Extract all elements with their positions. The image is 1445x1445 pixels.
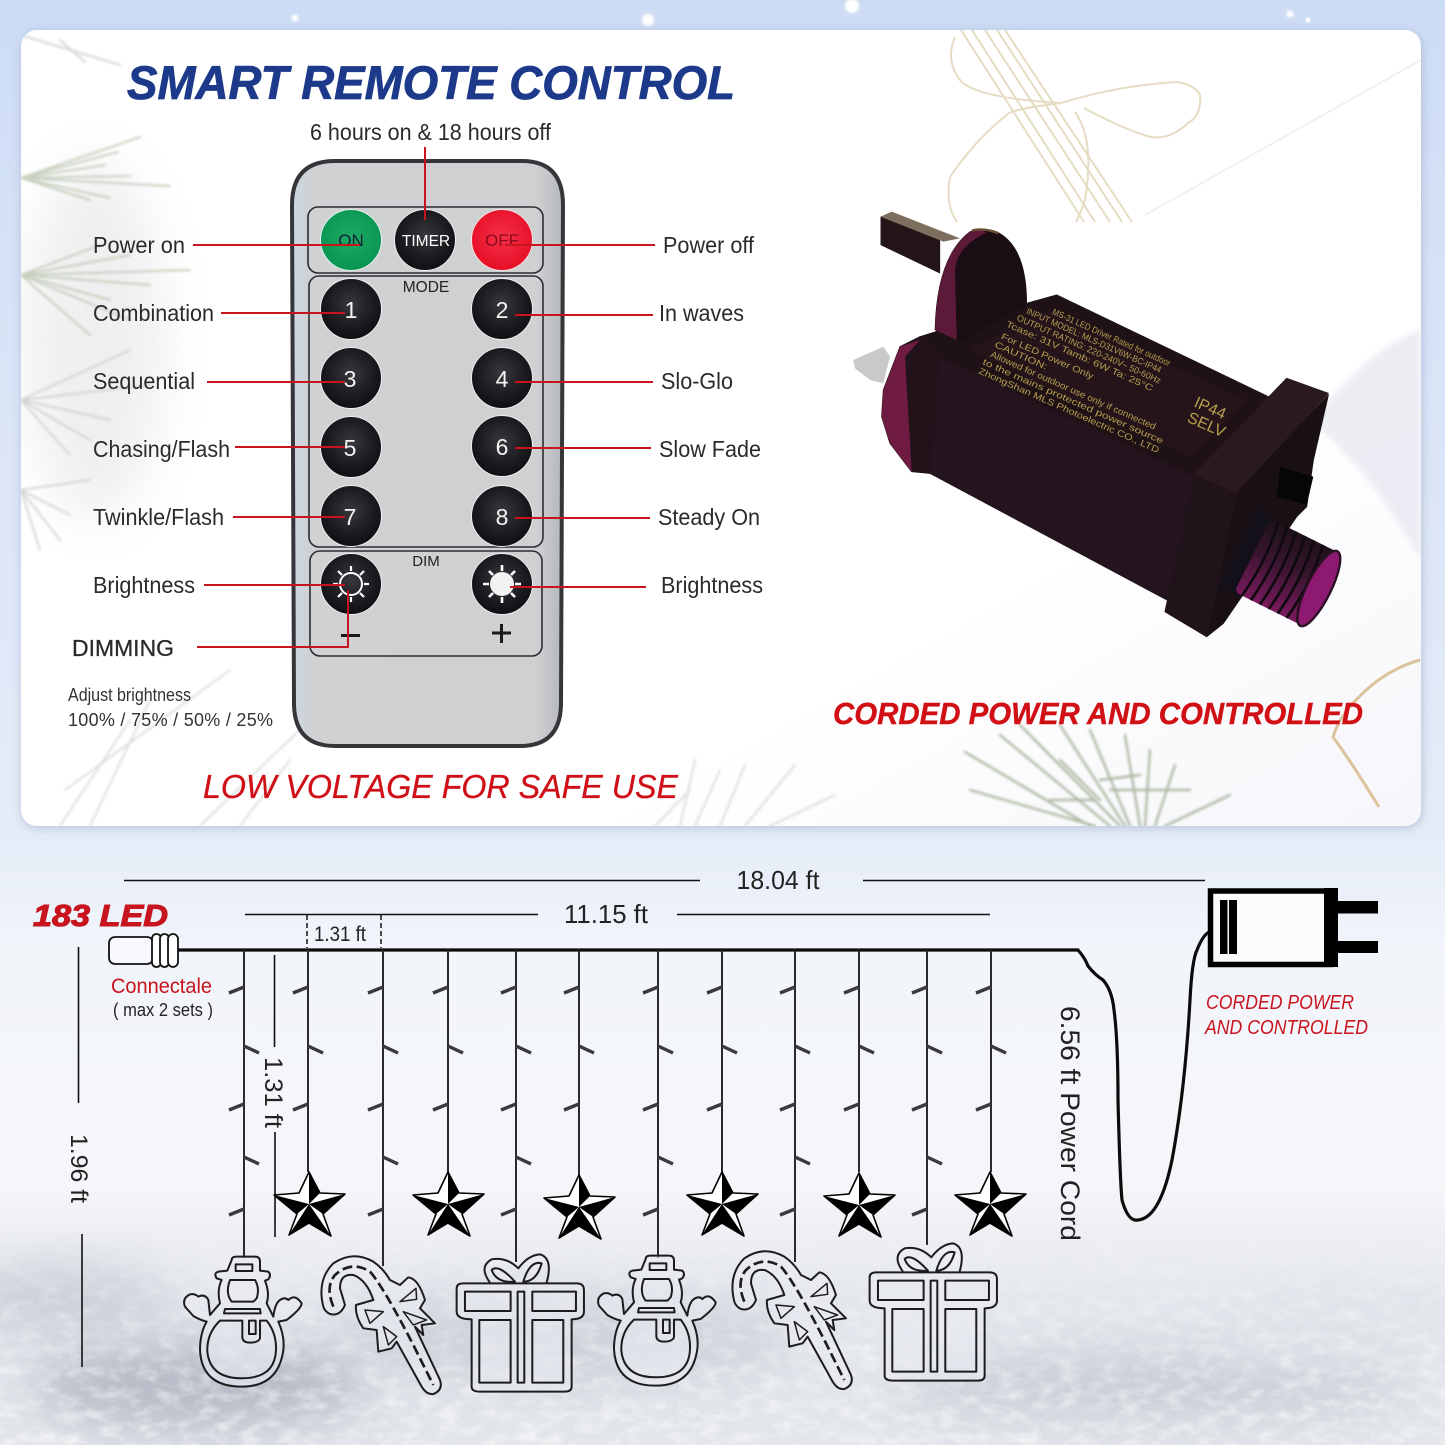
adapter printed label: CAUTION: bbox=[993, 339, 1049, 372]
button: TIMER: TIMER bbox=[402, 233, 450, 250]
button: 5 bbox=[320, 416, 382, 478]
adapter printed label: Allowed for outdoor use only if connected bbox=[989, 349, 1157, 432]
label: corded power bbox=[1204, 992, 1368, 1039]
panel: smart remote control bbox=[21, 30, 1421, 826]
adapter printed label: OUTPUT RATING: 220-240V~ 50-60Hz bbox=[1015, 313, 1163, 386]
callout labels: Brightness bbox=[661, 572, 763, 598]
label: connectable bbox=[111, 975, 213, 1020]
dimming note bbox=[68, 685, 273, 730]
callout labels: Power on bbox=[93, 232, 185, 258]
label: connectable: Connectale bbox=[111, 975, 212, 998]
dimension: 1.31 ft spacing: 1.31 ft bbox=[314, 923, 366, 946]
icon: star 4 bbox=[687, 1172, 758, 1236]
adapter printed label: ZhongShan MLS Photoelectric CO., LTD bbox=[977, 366, 1161, 455]
button: 7 bbox=[320, 486, 382, 546]
callout labels: Power off bbox=[663, 232, 755, 258]
decoration: panel background foliage and ribbons bbox=[21, 30, 1421, 826]
button: ON bbox=[320, 210, 382, 270]
icon: candy cane 2 bbox=[732, 1251, 852, 1389]
button: 6 bbox=[472, 416, 532, 476]
icon: star 5 bbox=[824, 1173, 895, 1237]
dimension: 1.96 ft height: 1.96 ft bbox=[65, 1134, 92, 1203]
callout labels: Slow Fade bbox=[659, 436, 761, 462]
button panels outlines bbox=[308, 207, 543, 656]
button: 4 bbox=[472, 348, 532, 408]
LED strands bbox=[229, 950, 1006, 1266]
callout labels: Slo-Glo bbox=[661, 368, 733, 394]
callout labels: Sequential bbox=[93, 368, 195, 394]
label: DIM: DIM bbox=[412, 553, 440, 570]
symbol: plus bbox=[492, 624, 511, 643]
icon: snowman 1 bbox=[184, 1257, 302, 1387]
callout labels: In waves bbox=[659, 300, 744, 326]
dimension: 1.31 ft spacing bbox=[307, 915, 381, 948]
button: OFF bbox=[472, 210, 532, 270]
adapter printed label: IP44 bbox=[1191, 394, 1229, 423]
button: 1: 1 bbox=[345, 297, 357, 323]
button: 3 bbox=[320, 348, 382, 408]
main wire and power cord bbox=[178, 932, 1209, 1220]
button: 2: 2 bbox=[496, 297, 508, 323]
callout labels: Brightness bbox=[93, 572, 195, 598]
icon: snowman 2 bbox=[598, 1256, 716, 1386]
power adapter photo bbox=[853, 212, 1349, 637]
adapter printed label: Tcase: 31V Tamb: 6W Ta: 25°C bbox=[1005, 319, 1155, 393]
button: 5: 5 bbox=[344, 435, 356, 461]
button: 2 bbox=[472, 278, 532, 340]
heading: corded power: CORDED POWER AND CONTROLLED bbox=[833, 696, 1363, 731]
icon: candy cane 1 bbox=[321, 1256, 441, 1394]
callout lines bbox=[193, 147, 655, 647]
icon: star 2 bbox=[413, 1172, 484, 1236]
label: MODE: MODE bbox=[403, 279, 449, 296]
adapter printed label: to the mains protected power source bbox=[981, 357, 1165, 446]
button: 8: 8 bbox=[496, 504, 508, 530]
dimension: power cord: 6.56 ft Power Cord bbox=[1055, 1006, 1085, 1241]
dimension: 18.04 ft: 18.04 ft bbox=[736, 865, 820, 895]
adapter printed label bbox=[977, 289, 1244, 477]
button: ON: ON bbox=[338, 231, 364, 250]
label: 183 LED: 183 LED bbox=[33, 898, 168, 933]
dimension: 11.15 ft: 11.15 ft bbox=[564, 899, 649, 929]
label: corded power: CORDED POWER bbox=[1206, 992, 1354, 1014]
icon: plug bbox=[1210, 888, 1378, 967]
heading: low voltage: LOW VOLTAGE FOR SAFE USE bbox=[203, 768, 679, 805]
callout labels bbox=[72, 119, 763, 661]
adapter printed label: MS-31 LED Driver Rated for outdoor bbox=[1051, 307, 1172, 368]
button: 8 bbox=[472, 486, 532, 546]
adapter printed label: INPUT MODEL: MLS-D31V6W-BC-IP44 bbox=[1025, 306, 1163, 375]
adapter printed label: SELV bbox=[1185, 409, 1228, 441]
icon: gift 2 bbox=[870, 1243, 997, 1381]
title: SMART REMOTE CONTROL bbox=[127, 56, 735, 109]
connector bbox=[109, 934, 178, 967]
icon: star 3 bbox=[544, 1175, 615, 1239]
callout labels: Twinkle/Flash bbox=[93, 504, 224, 530]
button: 7: 7 bbox=[344, 504, 356, 530]
callout labels: Combination bbox=[93, 300, 214, 326]
dimming note: Adjust brightness bbox=[68, 685, 191, 705]
button: 6: 6 bbox=[496, 434, 508, 460]
callout labels: 6 hours on & 18 hours off bbox=[310, 119, 552, 145]
label: corded power: AND CONTROLLED bbox=[1204, 1017, 1368, 1039]
button: dim down bbox=[320, 554, 382, 614]
callout labels: DIMMING bbox=[72, 635, 174, 661]
button: dim up bbox=[472, 554, 532, 614]
button: 1 bbox=[320, 278, 382, 340]
callout labels: Steady On bbox=[658, 504, 760, 530]
label: connectable: ( max 2 sets ) bbox=[113, 1000, 213, 1020]
button: 4: 4 bbox=[496, 366, 509, 392]
icon: star 1 bbox=[274, 1172, 345, 1236]
symbol: minus bbox=[341, 634, 360, 637]
remote control bbox=[292, 161, 563, 746]
dimension: 1.31 ft drop: 1.31 ft bbox=[259, 1057, 287, 1128]
icon: star 6 bbox=[955, 1172, 1026, 1236]
button: OFF: OFF bbox=[485, 231, 519, 250]
icon: gift 1 bbox=[457, 1254, 584, 1392]
adapter printed label: For LED Power Only bbox=[1000, 331, 1096, 381]
callout labels: Chasing/Flash bbox=[93, 436, 230, 462]
button: 3: 3 bbox=[344, 366, 356, 392]
dimension: 1.96 ft height bbox=[65, 947, 92, 1367]
button: TIMER bbox=[394, 210, 456, 270]
dimming note: 100% / 75% / 50% / 25% bbox=[68, 710, 273, 730]
